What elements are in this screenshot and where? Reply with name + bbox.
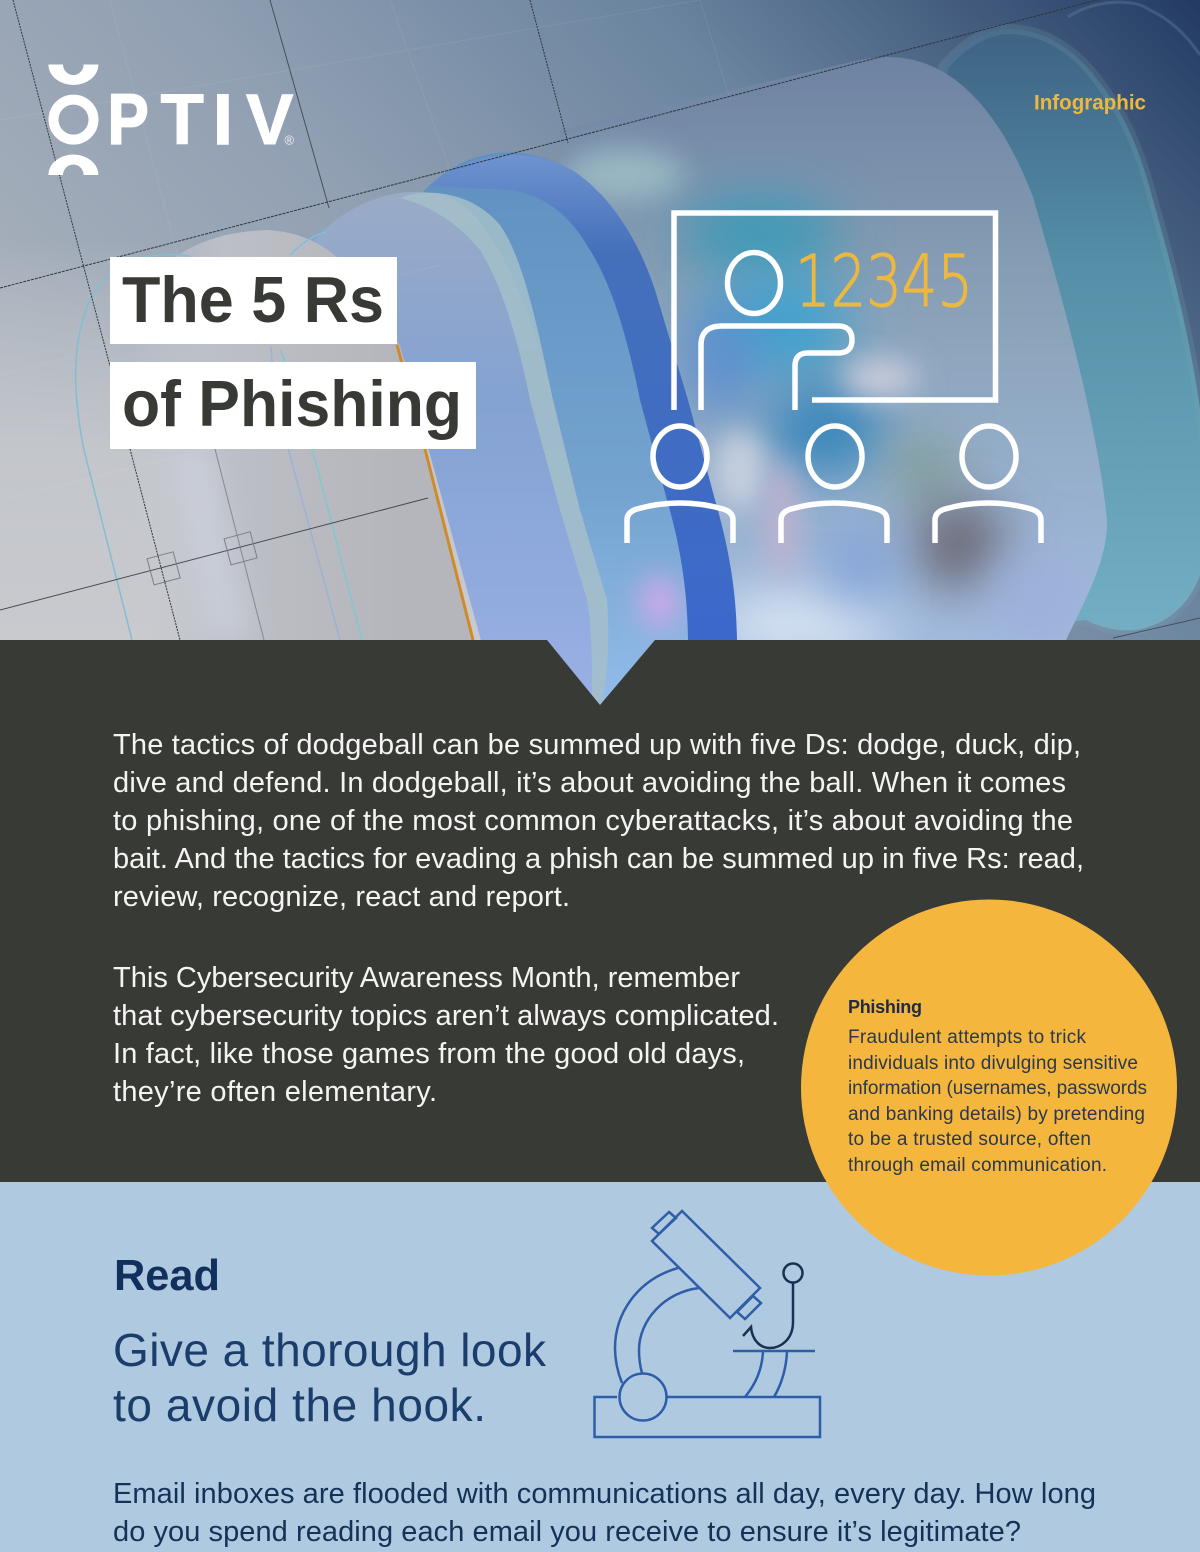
grey arch with orange edge [176,230,474,640]
board numbers: 12345 [795,240,973,323]
text block: awareness month paragraph: that cybersecurity topics aren’t always complicated. [113,1000,779,1032]
text block: intro paragraph: review, recognize, react and report. [113,881,570,913]
subheading: tagline: Give a thorough look [113,1324,547,1376]
text block: intro paragraph: dive and defend. In dodgeball, it’s about avoiding the ball. When it comes [113,767,1066,799]
callout: phishing definition circle: information (usernames, passwords [848,1078,1147,1099]
callout: phishing definition circle: and banking details) by pretending [848,1104,1145,1125]
title: The 5 Rs of Phishing [110,257,476,449]
logo: Optiv: P [108,81,149,160]
audience member two [781,426,887,543]
text block: intro paragraph [113,729,1084,913]
logo: Optiv [48,64,295,175]
title: The 5 Rs of Phishing: The 5 Rs [122,263,384,336]
dark construction lines [0,0,1200,640]
text block: awareness month paragraph [113,962,779,1108]
glass rim [400,193,608,710]
text block: awareness month paragraph: they’re often elementary. [113,1076,437,1108]
logo: Optiv: ® [284,132,294,148]
text block: awareness month paragraph: This Cybersecurity Awareness Month, remember [113,962,740,994]
board [674,213,996,410]
logo: Optiv: T [160,81,204,160]
panel: dark intro section with pointer [0,640,1200,1183]
callout: phishing definition circle: Fraudulent attempts to trick [848,1027,1086,1048]
callout: phishing definition circle [801,900,1177,1276]
logo: Optiv: V [246,81,293,160]
thin cyan arcs [76,232,362,640]
faint grid [390,0,730,100]
text block: intro paragraph: bait. And the tactics for evading a phish can be summed up in five Rs: read, [113,843,1084,875]
subheading: tagline [113,1324,547,1431]
text block: read body [113,1478,1096,1548]
audience member three [935,426,1041,543]
text block: intro paragraph: The tactics of dodgeball can be summed up with five Ds: dodge, duck, dip, [113,729,1081,761]
mid blue arch [420,152,737,710]
callout: phishing definition circle: to be a trusted source, often [848,1129,1091,1150]
soft vertical sheen [183,456,248,639]
text block: awareness month paragraph: In fact, like those games from the good old days, [113,1038,745,1070]
subheading: tagline: to avoid the hook. [113,1379,486,1431]
icon: classroom presenter and audience [627,213,1041,543]
logo: Optiv: I [213,81,233,160]
deep blue band [430,155,737,645]
front blue arch [314,192,608,710]
heading: Read: Read [114,1251,220,1300]
back glass arch [938,24,1200,630]
icon: microscope with fish hook [594,1211,820,1437]
text block: read body: Email inboxes are flooded with communications all day, every day. How long [113,1478,1096,1510]
text block: intro paragraph: to phishing, one of the most common cyberattacks, it’s about avoiding the [113,805,1073,837]
callout: phishing definition circle: individuals into divulging sensitive [848,1053,1138,1074]
presenter [701,252,852,410]
label: Infographic: Infographic [1034,92,1146,114]
far back glass arch [1068,2,1200,55]
text block: read body: do you spend reading each email you receive to ensure it’s legitimate? [113,1516,1021,1548]
callout: phishing definition circle: through email communication. [848,1155,1107,1176]
panel: read section background [0,1182,1200,1552]
audience member one [627,426,733,543]
panel: hero abstract background [0,0,1200,710]
fish hook [743,1264,802,1348]
large translucent pill with blurred colour blobs [564,57,1107,640]
alignment squares [147,532,257,585]
callout: phishing definition circle: Phishing [848,997,922,1017]
lavender glow [640,576,680,628]
title: The 5 Rs of Phishing: of Phishing [122,367,462,440]
